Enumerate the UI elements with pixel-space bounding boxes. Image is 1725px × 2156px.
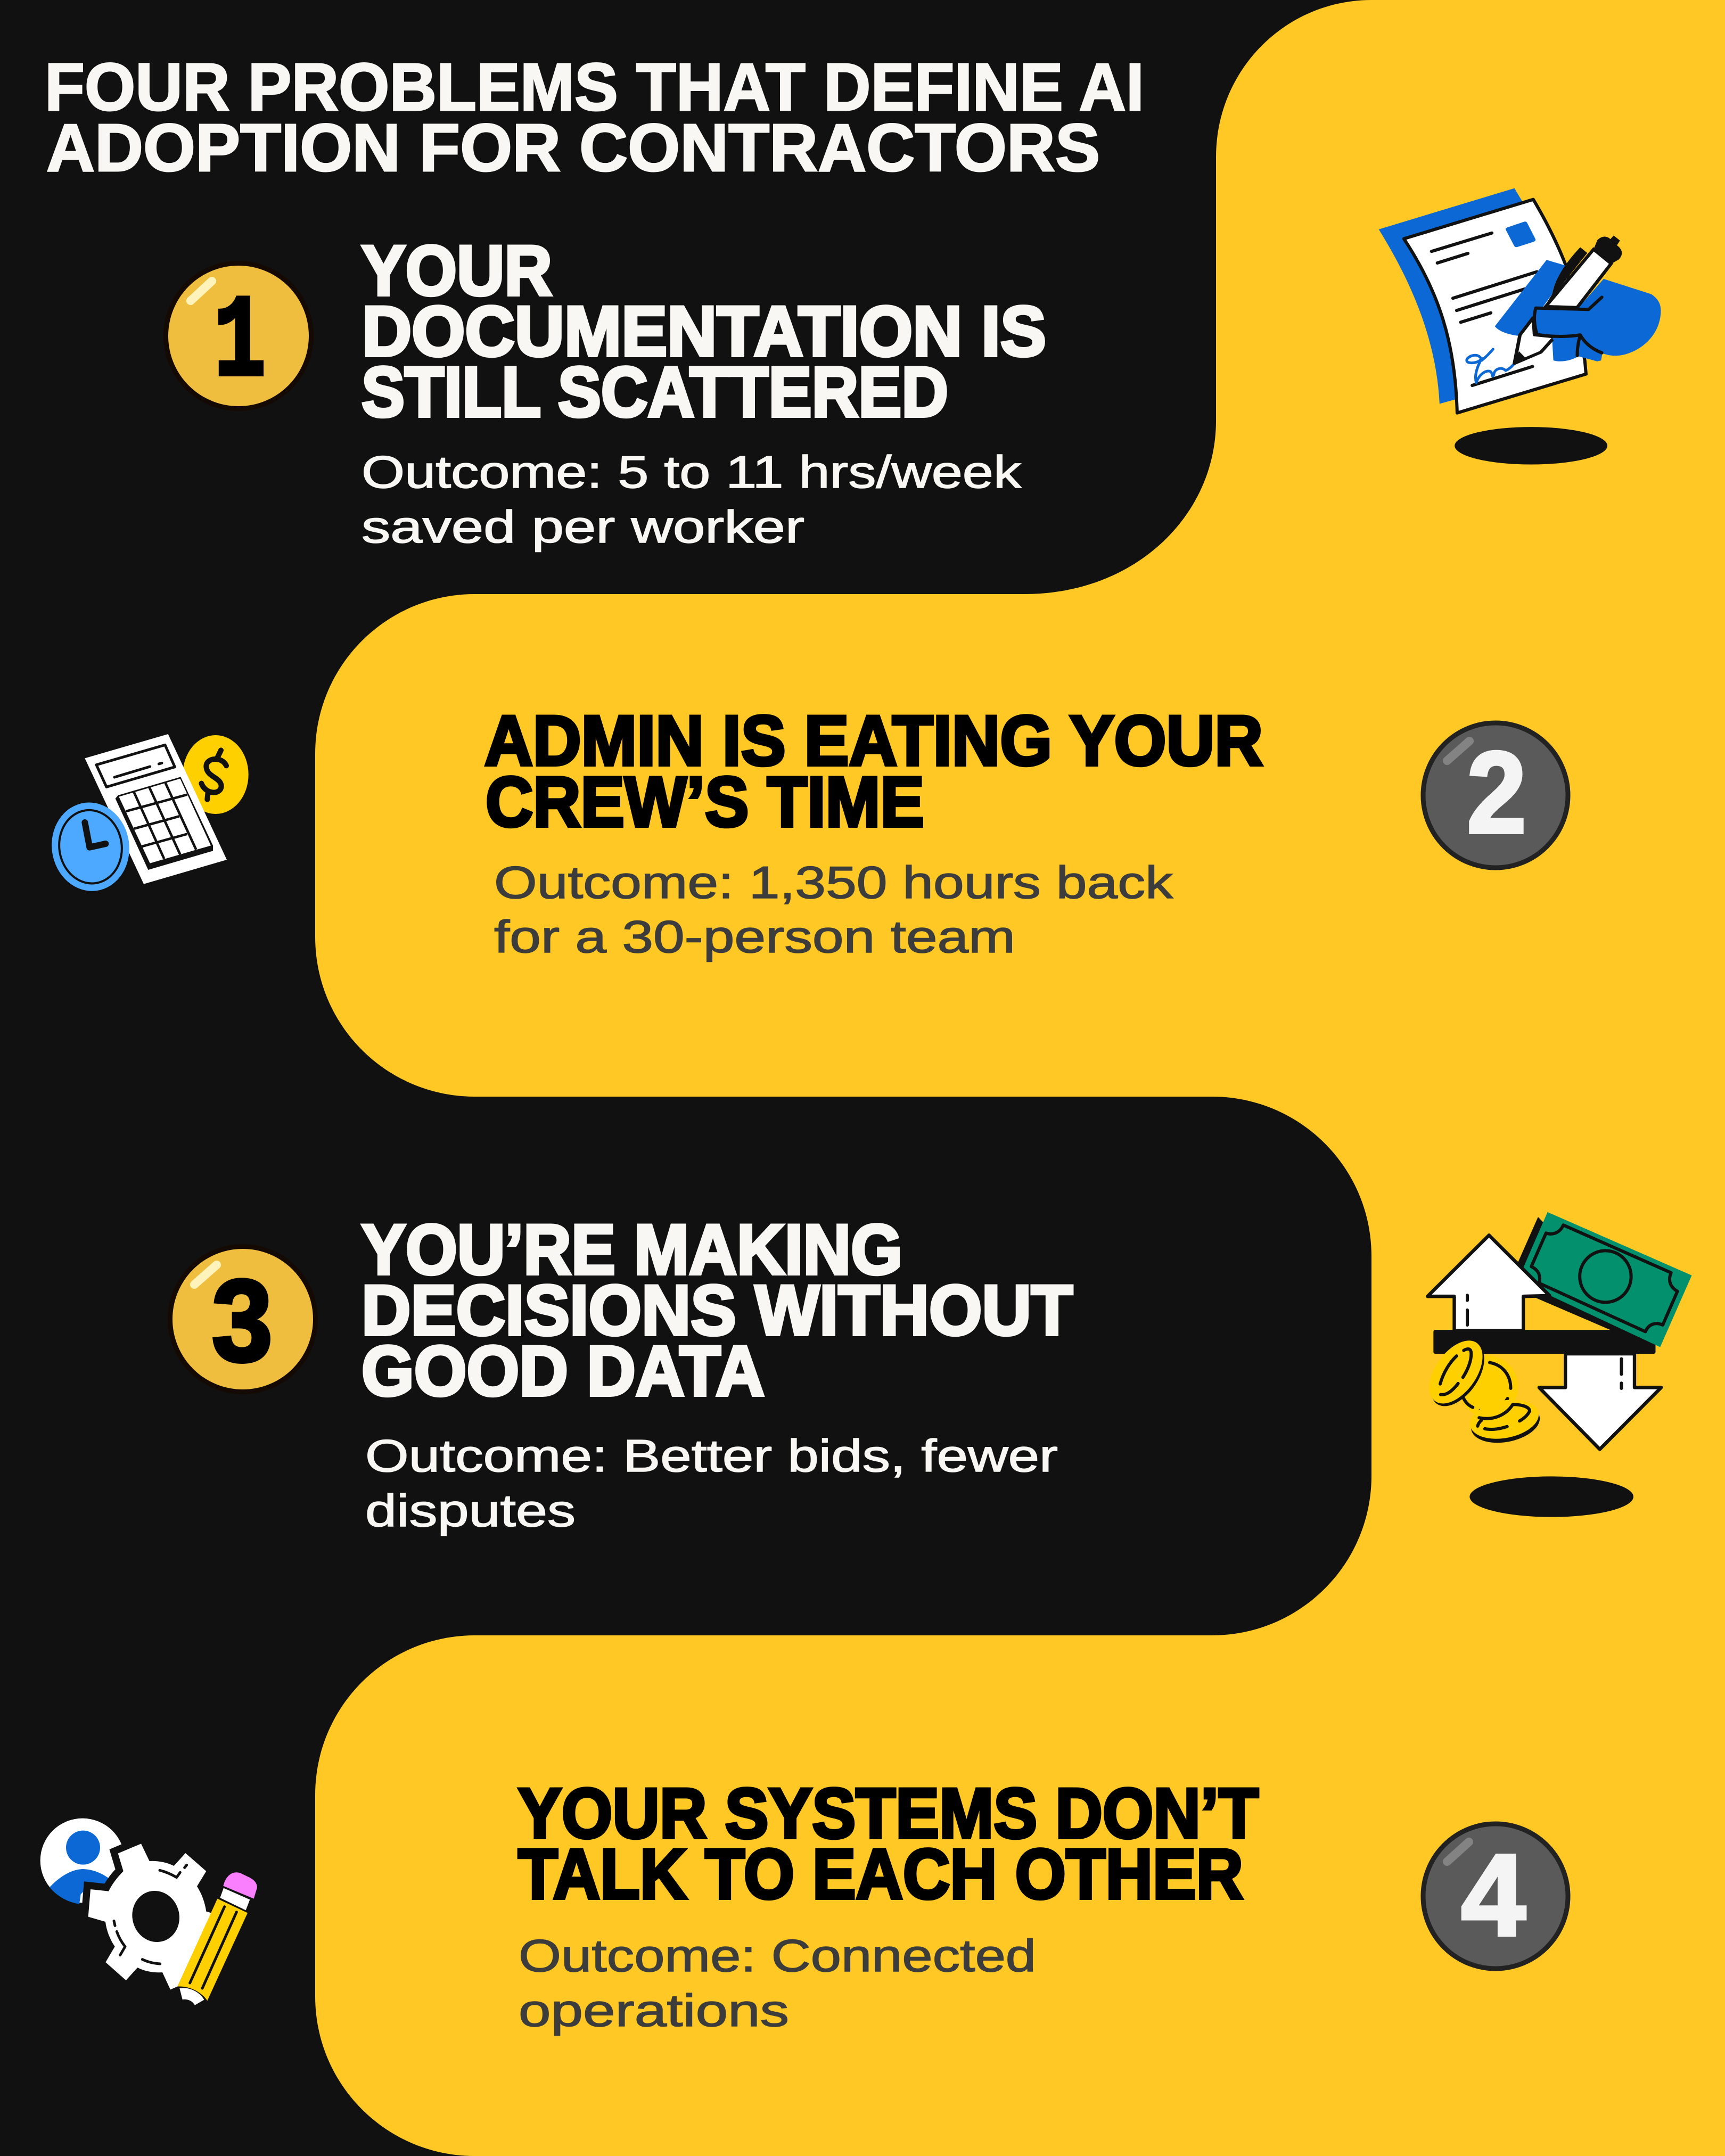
pen barrel <box>1546 249 1611 307</box>
outcome 3: disputes <box>365 1486 576 1536</box>
icon: calculator, clock and coin <box>46 734 249 896</box>
keypad depth <box>116 777 213 870</box>
hand palm <box>1552 279 1661 361</box>
heading 2: ADMIN IS EATING YOUR <box>484 702 1263 780</box>
gear hole <box>127 1886 185 1947</box>
gear <box>88 1844 211 1989</box>
coin back marks <box>1464 1363 1510 1411</box>
heading 1: DOCUMENTATION IS <box>362 292 1046 371</box>
heading 2: CREW’S TIME <box>486 763 924 842</box>
panel: documentation <box>166 188 1661 553</box>
heading 1: STILL SCATTERED <box>362 353 948 432</box>
up arrow <box>1427 1235 1550 1330</box>
number badge 1 <box>166 263 311 409</box>
outcome 4: operations <box>519 1986 789 2036</box>
white page <box>1404 200 1586 413</box>
number badge 2 <box>1423 723 1568 868</box>
pencil eraser <box>223 1872 257 1899</box>
title: FOUR PROBLEMS THAT DEFINE AI <box>45 50 1144 125</box>
user disc <box>40 1818 125 1903</box>
heading 1 <box>362 232 1046 432</box>
number badge 1: 1 <box>214 278 266 409</box>
green bill <box>1523 1212 1692 1347</box>
number badge 3: 3 <box>212 1256 273 1386</box>
dollar coin <box>183 735 249 814</box>
heading 2 <box>484 702 1263 842</box>
clock face <box>46 797 135 896</box>
flat coin marks <box>1477 1404 1530 1429</box>
outcome 1: Outcome: 5 to 11 hrs/week <box>362 447 1022 498</box>
tilted coin shadow <box>1420 1333 1495 1416</box>
outcome 2 <box>494 858 1173 962</box>
pen tip <box>1514 351 1525 364</box>
pen nib <box>1514 318 1555 364</box>
text lines <box>1432 233 1537 385</box>
balance bar <box>1433 1330 1656 1354</box>
panel: decisions <box>170 1211 1692 1536</box>
heading 3 <box>362 1211 1073 1411</box>
down arrow dashes <box>1620 1359 1623 1388</box>
keypad grid <box>126 783 196 859</box>
icon: money with up and down arrows <box>1419 1212 1692 1517</box>
keypad face <box>119 779 211 863</box>
hand wrist <box>1495 260 1566 336</box>
number badge 4 <box>1423 1824 1568 1969</box>
outcome 2: Outcome: 1,350 hours back <box>494 858 1173 908</box>
dollar sign <box>201 750 226 800</box>
back sheet <box>1379 188 1582 404</box>
icon: document being signed <box>1379 188 1661 465</box>
signature <box>1467 349 1516 383</box>
number badge 4: 4 <box>1461 1831 1526 1960</box>
panel: admin <box>46 702 1568 962</box>
thumb outline <box>1534 297 1602 356</box>
number badge 3 <box>170 1247 315 1392</box>
outcome 3 <box>365 1431 1058 1536</box>
flat coin shadow <box>1468 1398 1543 1448</box>
up arrow dashes <box>1466 1295 1469 1325</box>
heading 4 <box>518 1774 1259 1914</box>
outcome 1 <box>362 447 1022 553</box>
bill inner border <box>1531 1225 1678 1331</box>
clock hands <box>85 822 105 847</box>
outcome 3: Outcome: Better bids, fewer <box>365 1431 1058 1482</box>
pencil tip <box>179 1988 204 2005</box>
outcome 4 <box>519 1931 1036 2036</box>
panel: systems <box>40 1774 1568 2036</box>
gear marks <box>114 1865 187 1964</box>
title: ADOPTION FOR CONTRACTORS <box>46 110 1100 185</box>
thumb <box>1534 297 1602 355</box>
coin back <box>1459 1356 1518 1418</box>
stamp <box>1506 221 1535 247</box>
user shoulders <box>50 1869 110 1904</box>
heading 3: YOU’RE MAKING <box>362 1211 902 1289</box>
clock ring <box>54 806 127 887</box>
outcome 1: saved per worker <box>362 502 804 553</box>
bill medallion <box>1580 1250 1631 1302</box>
ground shadow <box>1469 1476 1633 1517</box>
pencil ferrule <box>220 1888 250 1910</box>
icon: user, gear and pencil <box>40 1818 257 2005</box>
display marks <box>114 763 162 777</box>
tilted coin marks <box>1440 1349 1471 1395</box>
calculator body <box>85 734 227 884</box>
ground shadow <box>1455 427 1607 465</box>
down arrow <box>1539 1354 1661 1449</box>
heading 3: DECISIONS WITHOUT <box>362 1271 1073 1350</box>
pencil grooves <box>190 1907 236 1988</box>
calculator display <box>96 745 175 787</box>
outcome 4: Outcome: Connected <box>519 1931 1036 1981</box>
outcome 2: for a 30-person team <box>494 912 1015 962</box>
pen cap <box>1593 235 1622 265</box>
heading 3: GOOD DATA <box>362 1332 765 1411</box>
bill shadow <box>1518 1217 1656 1342</box>
pen shadow <box>1545 248 1587 307</box>
title <box>45 50 1144 185</box>
heading 4: YOUR SYSTEMS DON’T <box>518 1774 1259 1853</box>
heading 1: YOUR <box>362 232 552 310</box>
tilted coin <box>1419 1330 1493 1413</box>
heading 4: TALK TO EACH OTHER <box>518 1835 1243 1914</box>
pencil body <box>177 1899 248 2001</box>
number badge 2: 2 <box>1467 728 1526 858</box>
flat coin <box>1467 1394 1542 1444</box>
user head <box>66 1831 100 1865</box>
